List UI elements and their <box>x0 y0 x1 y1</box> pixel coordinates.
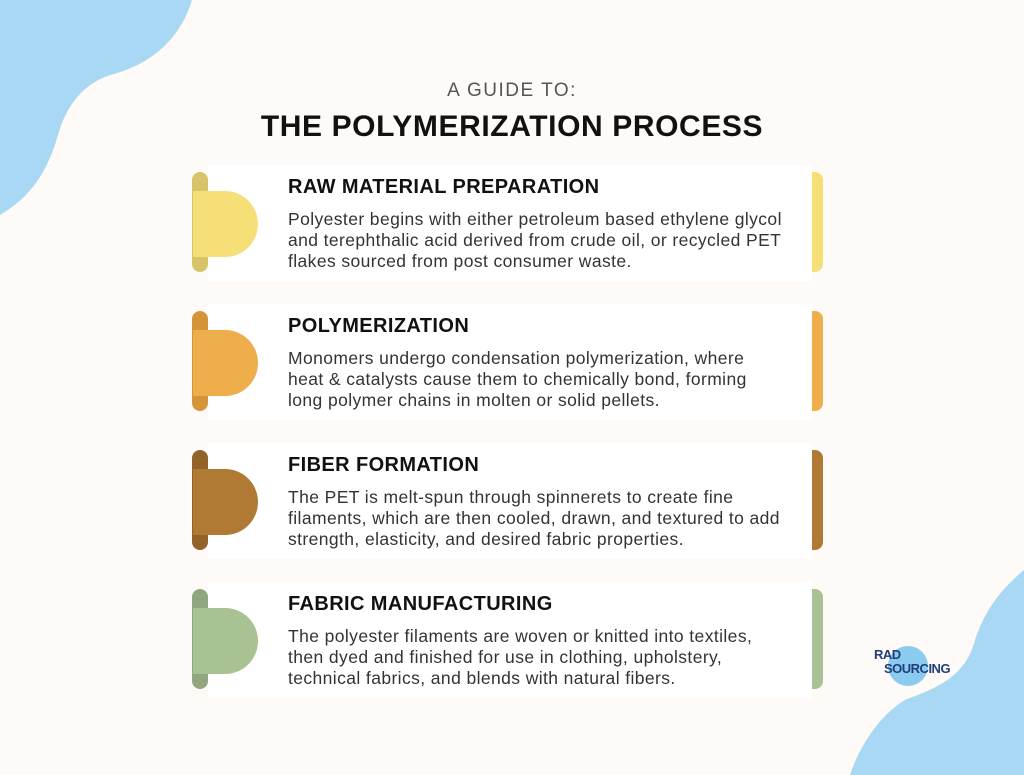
panel: raw material preparation: flakes sourced from post consumer waste. <box>288 251 632 271</box>
panel: raw material preparation: RAW MATERIAL PREPARATION <box>288 176 599 198</box>
panel: polymerization <box>192 311 823 411</box>
logo: SOURCING <box>884 661 950 676</box>
panel: fiber formation: filaments, which are then cooled, drawn, and textured to add <box>288 508 780 528</box>
panel: polymerization: POLYMERIZATION <box>288 315 469 337</box>
panel: raw material preparation: Polyester begins with either petroleum based ethylene glycol <box>288 209 782 229</box>
panel: fabric manufacturing: then dyed and finished for use in clothing, upholstery, <box>288 647 722 667</box>
panel: fabric manufacturing: technical fabrics, and blends with natural fibers. <box>288 668 676 688</box>
panel: fiber formation: The PET is melt-spun through spinnerets to create fine <box>288 487 733 507</box>
panel: polymerization: heat & catalysts cause them to chemically bond, forming <box>288 369 747 389</box>
panel: fiber formation <box>192 450 823 550</box>
logo <box>874 646 950 686</box>
panel: fabric manufacturing: FABRIC MANUFACTURING <box>288 593 553 615</box>
panel: fiber formation: strength, elasticity, and desired fabric properties. <box>288 529 684 549</box>
logo: RAD <box>874 647 901 662</box>
panel: raw material preparation: and terephthalic acid derived from crude oil, or recycled PET <box>288 230 781 250</box>
panel: polymerization: long polymer chains in molten or solid pellets. <box>288 390 660 410</box>
title: THE POLYMERIZATION PROCESS <box>261 110 763 143</box>
subtitle: A GUIDE TO: <box>447 80 577 101</box>
panel: raw material preparation <box>192 172 823 272</box>
panel: fabric manufacturing <box>192 589 823 689</box>
panel: fiber formation: FIBER FORMATION <box>288 454 479 476</box>
panel: polymerization: Monomers undergo condensation polymerization, where <box>288 348 744 368</box>
panel: fabric manufacturing: The polyester filaments are woven or knitted into textiles, <box>288 626 752 646</box>
